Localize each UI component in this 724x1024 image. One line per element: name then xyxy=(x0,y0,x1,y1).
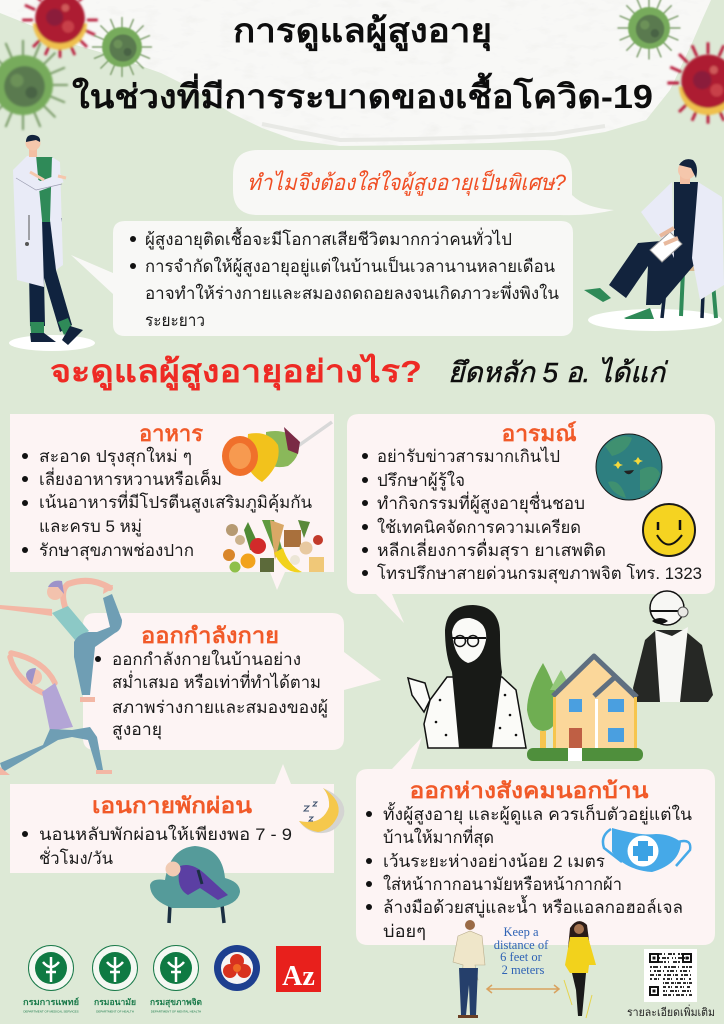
panel: food: สะอาด ปรุงสุกใหม่ ๆ xyxy=(39,446,192,467)
panel: social distancing: เว้นระยะห่างอย่างน้อย 2 เมตร xyxy=(383,852,605,871)
title: การดูแลผู้สูงอายุ xyxy=(233,12,492,52)
title xyxy=(72,12,653,115)
icon: assorted foods xyxy=(223,520,324,572)
panel: why seniors need care: อาจทำให้ร่างกายและสมองถดถอยลงจนเกิดภาวะพึ่งพิงใน xyxy=(145,281,559,303)
QR code xyxy=(644,949,697,1002)
logo: department of health: กรมอนามัย xyxy=(94,997,136,1007)
logo: round blue and red seal xyxy=(214,945,260,991)
icon: face mask xyxy=(603,828,690,872)
icon: woman in hijab xyxy=(408,605,526,748)
speech bubble: question: ทำไมจึงต้องใส่ใจผู้สูงอายุเป็นพิเศษ? xyxy=(247,169,567,196)
logo: department of medical services: กรมการแพทย์ xyxy=(23,997,79,1007)
icon: crescent moon xyxy=(299,788,344,833)
panel: exercise: ออกกำลังกายในบ้านอย่าง xyxy=(112,649,301,669)
logos row xyxy=(23,945,321,1014)
panel: food: เลี่ยงอาหารหวานหรือเค็ม xyxy=(39,467,222,489)
panel: social distancing xyxy=(356,737,715,945)
panel: rest: เอนกายพักผ่อน xyxy=(92,793,252,818)
panel: food: รักษาสุขภาพช่องปาก xyxy=(39,541,194,561)
icon: seated doctor xyxy=(584,159,724,331)
icon: green virus top right xyxy=(618,0,680,60)
icon: smiley xyxy=(643,504,695,556)
icon: salad on fork xyxy=(222,422,332,482)
icon: red virus right xyxy=(667,42,724,124)
illustration: seniors and house xyxy=(408,591,713,761)
icon: person sleeping on armchair xyxy=(150,846,240,923)
arrow: distance xyxy=(487,985,559,993)
panel: food: เน้นอาหารที่มีโปรตีนสูงเสริมภูมิคุ้มกัน xyxy=(39,490,312,513)
panel: food xyxy=(10,414,334,590)
panel: exercise: สภาพร่างกายและสมองของผู้ xyxy=(112,698,328,718)
icon: smiling globe xyxy=(596,434,662,500)
heading: how to care: จะดูแลผู้สูงอายุอย่างไร? xyxy=(50,353,422,391)
panel: emotion: ปรึกษาผู้รู้ใจ xyxy=(377,470,465,491)
logo: Az: Az xyxy=(282,961,315,992)
logo: department of mental health xyxy=(150,946,202,1014)
heading: how to care xyxy=(50,353,669,391)
panel: why seniors need care xyxy=(71,221,573,336)
panel: exercise: สูงอายุ xyxy=(112,720,162,740)
text: keep a distance xyxy=(494,925,549,977)
icon: house xyxy=(527,656,643,761)
torn paper header xyxy=(0,0,711,146)
icon: standing doctor xyxy=(9,135,95,351)
panel: emotion: หลีกเลี่ยงการดื่มสุรา ยาเสพติด xyxy=(377,538,606,561)
panel: emotion: อย่ารับข่าวสารมากเกินไป xyxy=(377,446,560,466)
title: ในช่วงที่มีการระบาดของเชื้อโควิด-19 xyxy=(72,72,653,115)
panel: food: และครบ 5 หมู่ xyxy=(39,517,142,537)
panel: social distancing: ใส่หน้ากากอนามัยหรือหน้ากากผ้า xyxy=(383,874,622,894)
caption: more details: รายละเอียดเพิ่มเติม xyxy=(627,1004,715,1019)
panel: rest: ชั่วโมง/วัน xyxy=(39,846,113,868)
panel: food: อาหาร xyxy=(139,421,203,446)
logo: department of mental health: DEPARTMENT OF MENTAL HEALTH xyxy=(151,1010,201,1014)
logo: department of mental health: กรมสุขภาพจิต xyxy=(150,997,202,1008)
logo: department of health: DEPARTMENT OF HEALTH xyxy=(96,1010,134,1014)
icon: red virus top left xyxy=(22,0,98,58)
panel: social distancing: ล้างมือด้วยสบู่และน้ำ หรือแอลกอฮอล์เจล xyxy=(383,895,683,918)
speech bubble: question xyxy=(233,150,614,215)
heading: how to care: ยึดหลัก 5 อ. ได้แก่ xyxy=(448,356,669,388)
panel: why seniors need care: ผู้สูงอายุติดเชื้อจะมีโอกาสเสียชีวิตมากกว่าคนทั่วไป xyxy=(145,227,512,250)
logo: department of medical services xyxy=(23,946,79,1014)
panel: why seniors need care: การจำกัดให้ผู้สูงอายุอยู่แต่ในบ้านเป็นเวลานานหลายเดือน xyxy=(145,255,555,277)
text: keep a distance: 2 meters xyxy=(502,963,544,977)
panel: exercise: ออกกำลังกาย xyxy=(141,623,279,648)
text: keep a distance: 6 feet or xyxy=(500,950,543,964)
panel: emotion: ใช้เทคนิคจัดการความเครียด xyxy=(377,517,581,537)
logo: Az xyxy=(276,946,321,992)
panel: why seniors need care: ระยะยาว xyxy=(145,311,205,330)
panel: rest xyxy=(10,764,334,873)
panel: emotion: ทำกิจกรรมที่ผู้สูงอายุชื่นชอบ xyxy=(377,491,585,514)
icon: green virus left xyxy=(0,40,68,130)
icon: green virus top xyxy=(92,17,152,77)
text: keep a distance: Keep a xyxy=(503,925,539,939)
logo: department of health xyxy=(92,946,138,1014)
icon: yoga woman lunging xyxy=(0,653,112,775)
panel: emotion: โทรปรึกษาสายด่วนกรมสุขภาพจิต โทร. 1323 xyxy=(377,563,702,584)
panel: exercise: สม่ำเสมอ หรือเท่าที่ทำได้ตาม xyxy=(112,670,321,692)
icon: yoga woman standing xyxy=(0,581,122,702)
logo: department of medical services: DEPARTMENT OF MEDICAL SERVICES xyxy=(23,1010,79,1014)
panel: social distancing: ออกห่างสังคมนอกบ้าน xyxy=(410,778,648,803)
icon: man with moustache xyxy=(633,591,713,702)
icon: woman keeping distance xyxy=(564,921,596,1018)
panel: social distancing: บ่อยๆ xyxy=(383,922,426,941)
icon: man keeping distance xyxy=(453,920,485,1018)
panel: social distancing: ทั้งผู้สูงอายุ และผู้ดูแล ควรเก็บตัวอยู่แต่ใน xyxy=(383,802,692,825)
panel: emotion: อารมณ์ xyxy=(502,421,576,446)
text: keep a distance: distance of xyxy=(494,938,549,952)
panel: exercise xyxy=(83,613,381,750)
panel: rest: นอนหลับพักผ่อนให้เพียงพอ 7 - 9 xyxy=(39,824,292,844)
panel: social distancing: บ้านให้มากที่สุด xyxy=(383,825,494,848)
panel: emotion xyxy=(347,414,715,623)
